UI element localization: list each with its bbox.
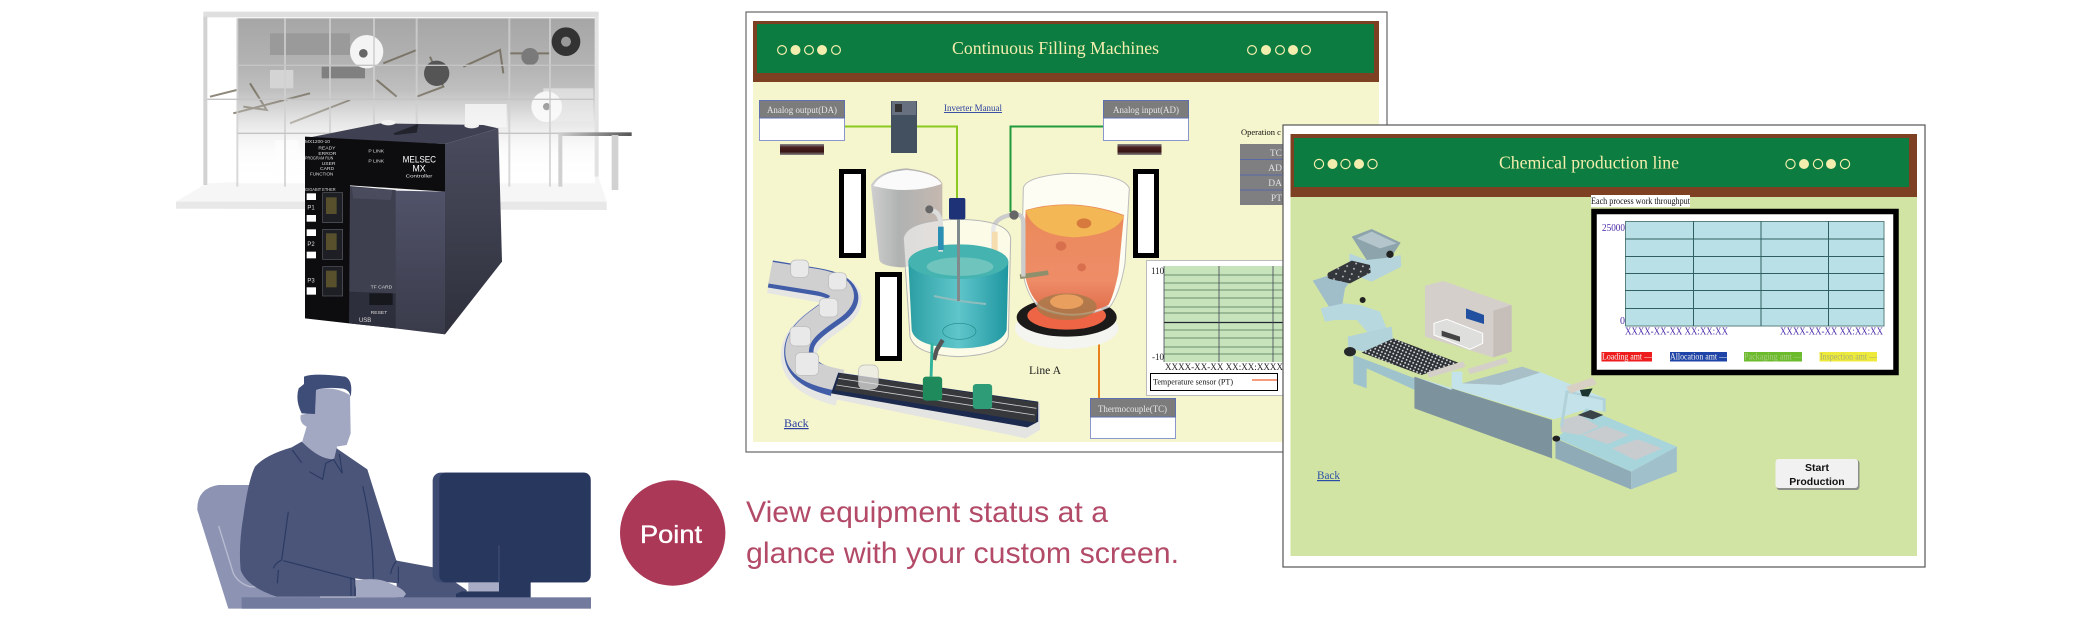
chart: temperature sensor: -10 <box>1152 352 1164 362</box>
level gauges <box>842 172 1156 358</box>
operation table: TC <box>1270 149 1282 159</box>
screen background <box>1290 197 1917 556</box>
analog output box: Analog output(DA) <box>767 105 837 116</box>
photo: MELSEC MX controller: GIGABIT ETHER <box>305 187 336 193</box>
desk <box>242 597 591 609</box>
chart: each process work throughput: Each process work throughput <box>1591 197 1690 207</box>
label: Line A: Line A <box>1029 365 1062 377</box>
button: Start Production: Production <box>1789 476 1845 488</box>
link: Back: Back <box>784 416 809 430</box>
operation table <box>1240 127 1290 205</box>
teal tank <box>903 219 1011 357</box>
photo: MELSEC MX controller: P3 <box>307 279 315 285</box>
hand <box>356 579 406 597</box>
neck and face <box>300 388 351 462</box>
thermocouple box <box>1090 398 1176 438</box>
chart: temperature sensor: XXXX-XX-XX XX:XX:XXXX <box>1165 362 1283 372</box>
photo: MELSEC MX controller: MELSEC <box>403 154 436 164</box>
operation table: DA <box>1268 179 1282 189</box>
legend <box>1602 352 1878 362</box>
chart: temperature sensor <box>1146 260 1386 396</box>
photo: MELSEC MX controller: CARD <box>320 166 335 172</box>
photo: MELSEC MX controller: PROGRAM RUN <box>305 155 334 161</box>
photo: MELSEC MX controller: Controller <box>406 174 433 180</box>
panel: Chemical production line screen <box>1283 125 1925 567</box>
legend: Inspection amt — <box>1820 352 1878 362</box>
screen background <box>753 82 1379 442</box>
legend: Allocation amt — <box>1670 352 1728 362</box>
photo: MELSEC MX controller: MX <box>412 164 426 174</box>
text: point description <box>746 496 1179 570</box>
badge: Point <box>620 480 725 586</box>
connector lines <box>845 126 1103 398</box>
link: Back: Back <box>1317 468 1340 482</box>
photo: packaging machine background <box>176 12 632 210</box>
button: Start Production: Start <box>1805 462 1829 474</box>
machine: lower tunnel and tray <box>1414 360 1677 489</box>
operation table: PT <box>1271 194 1282 204</box>
orange tank plate <box>1015 308 1118 349</box>
panel: Continuous Filling Machines screen <box>746 12 1387 452</box>
photo: MELSEC MX controller: P2 <box>307 242 315 248</box>
header bar <box>753 21 1379 82</box>
chart: each process work throughput: 0 <box>1620 316 1625 327</box>
chart: each process work throughput: 25000 <box>1602 223 1625 234</box>
header bar <box>1290 134 1917 197</box>
chart: each process work throughput: XXXX-XX-XX XX:XX:XX <box>1780 326 1884 338</box>
legend: Packaging amt — <box>1744 352 1803 362</box>
illustration: man at computer <box>197 375 591 609</box>
photo: MELSEC MX controller: READY <box>318 146 336 152</box>
analog input box <box>1104 100 1188 155</box>
chart: each process work throughput: XXXX-XX-XX XX:XX:XX <box>1625 326 1729 338</box>
photo: MELSEC MX controller: P1 <box>307 205 315 211</box>
analog input box: Analog input(AD) <box>1113 105 1179 116</box>
button: Start Production <box>1776 459 1860 490</box>
text: point description: glance with your custom screen. <box>746 537 1179 570</box>
chair <box>197 485 320 609</box>
photo: MELSEC MX controller: ERROR <box>318 151 337 157</box>
badge: Point: Point <box>640 521 702 549</box>
tanks <box>871 168 1129 360</box>
gray tank <box>871 168 942 267</box>
arm back <box>397 561 467 600</box>
operation table: Operation c <box>1241 127 1281 137</box>
photo: MELSEC MX controller: P LINK <box>368 149 385 155</box>
conveyor <box>770 260 1040 438</box>
photo: MELSEC MX controller <box>305 120 502 334</box>
link: Inverter Manual: Inverter Manual <box>944 103 1002 113</box>
monitor <box>433 473 591 582</box>
orange tank <box>1022 173 1129 315</box>
torso <box>240 442 398 597</box>
chart: temperature sensor: Temperature sensor (PT) <box>1153 376 1233 386</box>
legend: Loading amt — <box>1602 352 1653 362</box>
chart: temperature sensor: 110 <box>1151 266 1165 276</box>
header bar: Chemical production line <box>1499 152 1679 172</box>
icon: inverter <box>891 101 917 153</box>
text: point description: View equipment status at a <box>746 496 1108 529</box>
chart: each process work throughput <box>1591 195 1896 372</box>
photo: MELSEC MX controller: FUNCTION <box>310 171 334 177</box>
photo: MELSEC MX controller: MX1200-10 <box>305 139 330 145</box>
photo: MELSEC MX controller: USB <box>359 318 371 324</box>
hair <box>297 375 351 414</box>
photo: MELSEC MX controller: USER <box>322 161 336 167</box>
machine: upper feeder and cabinet <box>1313 229 1512 390</box>
photo: MELSEC MX controller: P LINK <box>368 158 385 164</box>
photo: MELSEC MX controller: RESET <box>371 310 387 316</box>
header bar: Continuous Filling Machines <box>952 38 1159 58</box>
thermocouple box: Thermocouple(TC) <box>1098 404 1167 415</box>
operation table: AD <box>1268 164 1282 174</box>
photo: MELSEC MX controller: TF CARD <box>371 285 393 291</box>
analog output box <box>760 100 844 155</box>
